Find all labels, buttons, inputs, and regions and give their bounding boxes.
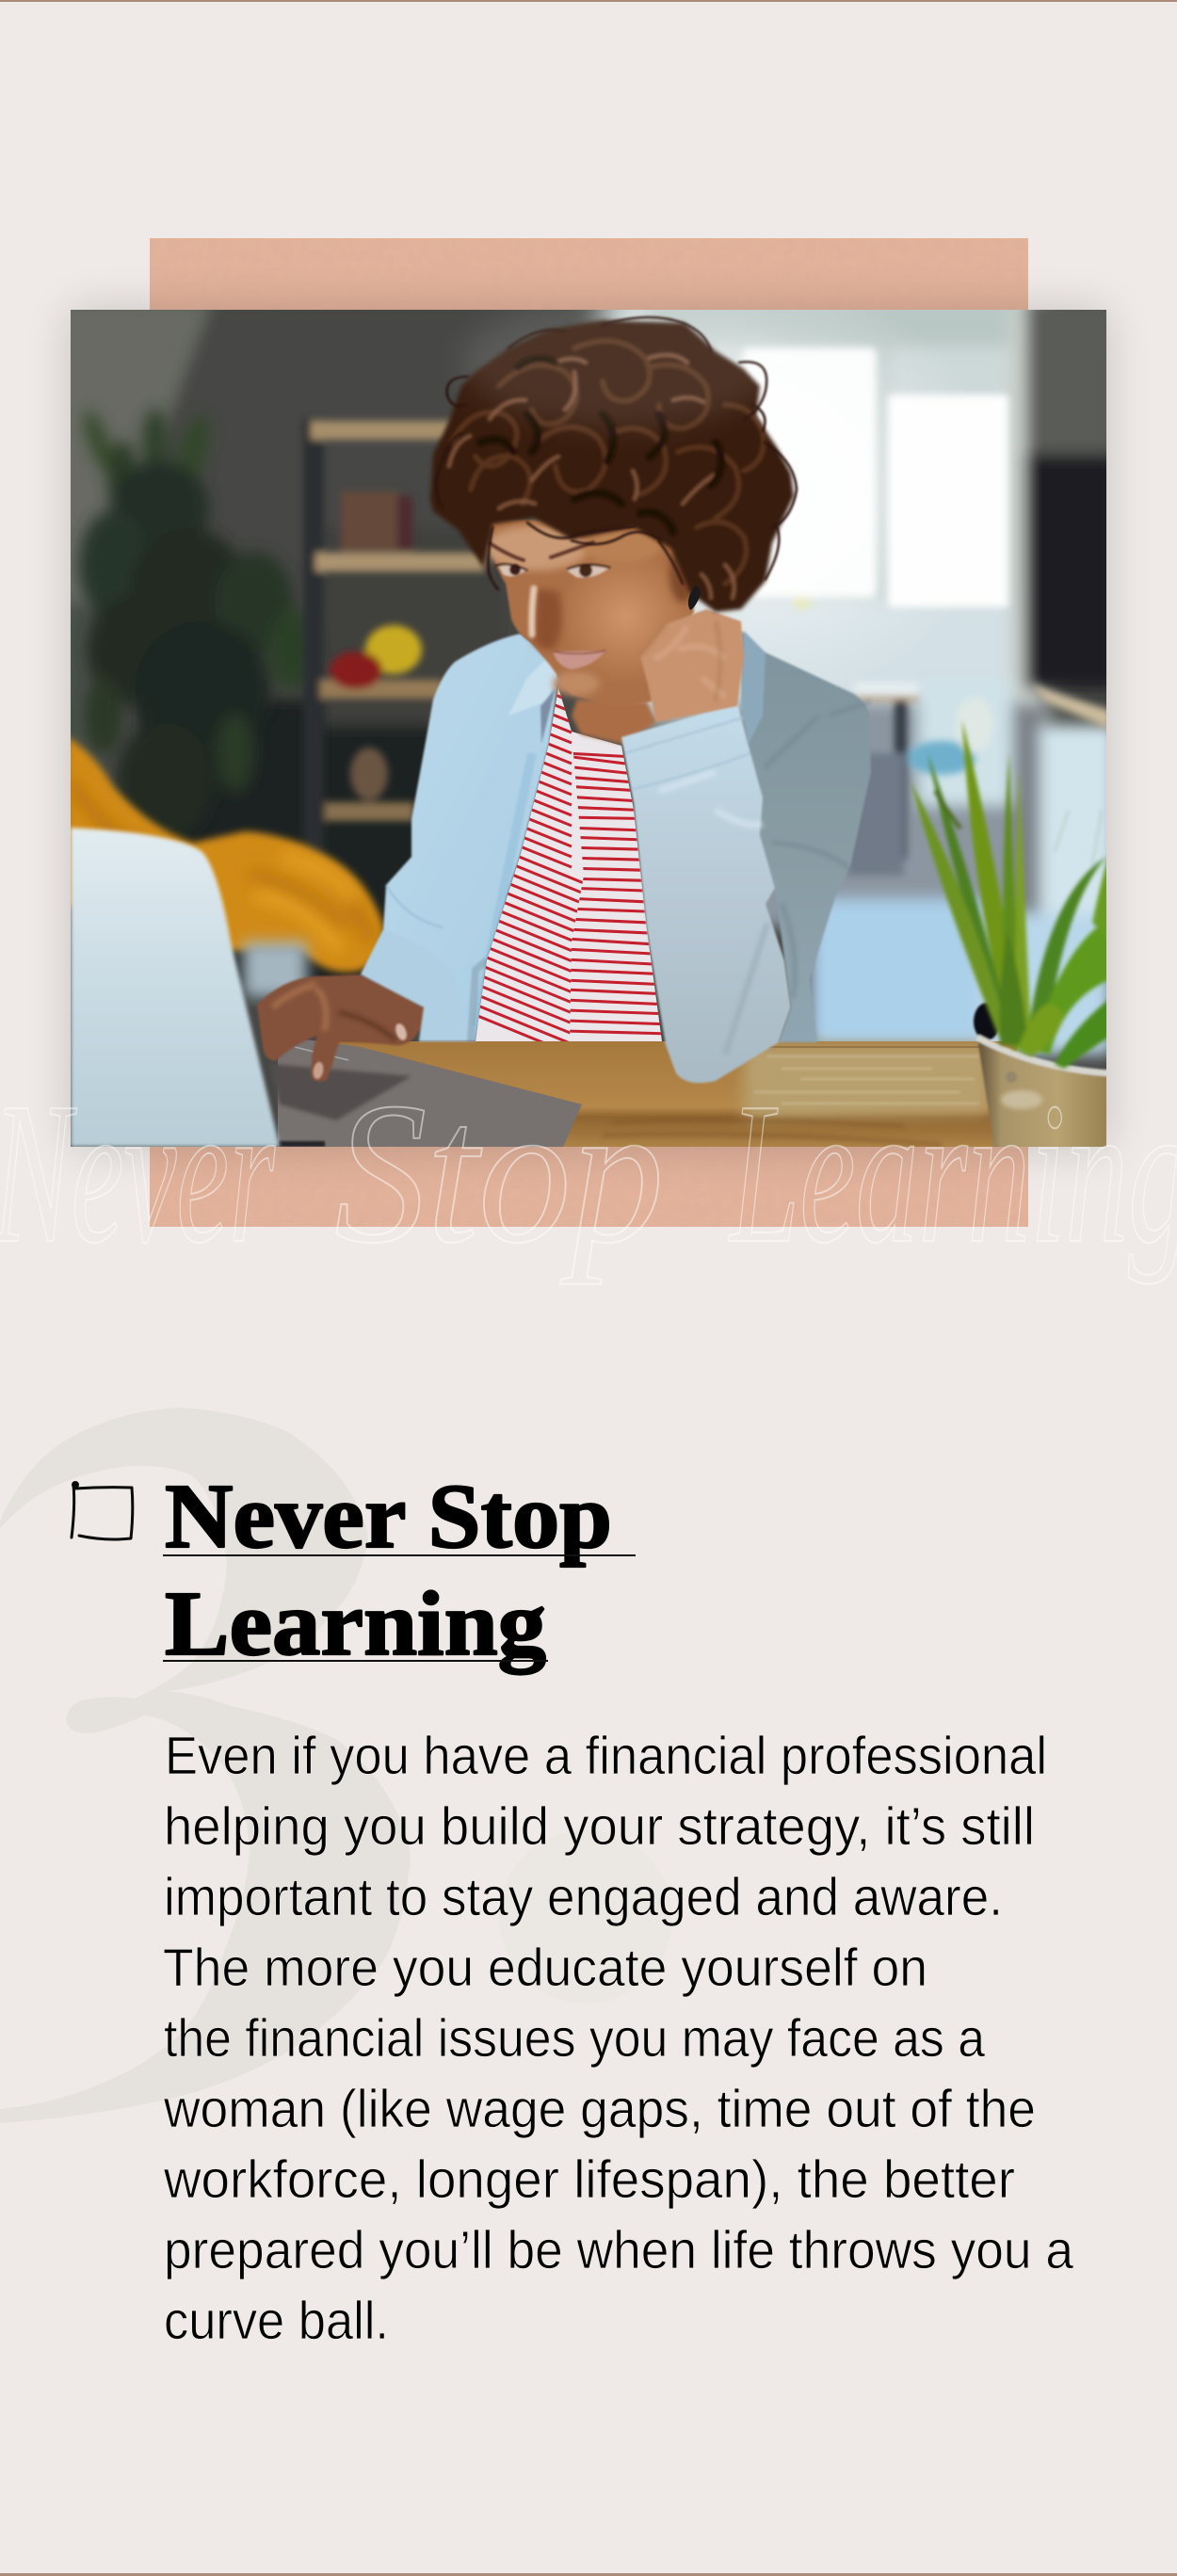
body line 9: curve ball. bbox=[164, 2291, 389, 2351]
body line 2: helping you build your strategy, it’s still bbox=[164, 1796, 1035, 1857]
body line 6: woman (like wage gaps, time out of the bbox=[163, 2079, 1036, 2139]
cabinet top board bbox=[1031, 684, 1111, 730]
windows bbox=[743, 348, 1008, 876]
heading underlines bbox=[163, 1554, 636, 1662]
earring bbox=[688, 586, 701, 610]
pink paper panel behind photo bbox=[150, 238, 1028, 1227]
eyes bbox=[499, 566, 525, 576]
laptop base bbox=[270, 1036, 582, 1147]
background script title bbox=[0, 1060, 1177, 1285]
neck bbox=[572, 700, 656, 744]
plant pot bbox=[974, 1003, 1111, 1149]
photo drop shadow bbox=[71, 310, 1106, 1147]
blurred plant on left bbox=[78, 408, 314, 840]
back-light haze on hair bbox=[461, 297, 782, 428]
ghost numeral 3 bbox=[0, 1408, 411, 2123]
grey shirt shoulder bbox=[741, 631, 871, 1042]
ghost numeral ball terminal bbox=[499, 1830, 672, 2004]
heading bbox=[165, 1466, 612, 1675]
body line 7: workforce, longer lifespan), the better bbox=[163, 2149, 1015, 2210]
soft light area of the room bbox=[603, 282, 1045, 725]
short curly hair bbox=[430, 297, 797, 612]
top border line bbox=[0, 0, 1177, 2]
blurred room background bbox=[71, 310, 520, 1006]
heading line 2: Learning bbox=[165, 1573, 546, 1675]
laptop lid bbox=[71, 828, 280, 1147]
body line 8: prepared you’ll be when life throws you a bbox=[164, 2220, 1073, 2280]
photo: woman working at laptop bbox=[56, 273, 1121, 1149]
body line 4: The more you educate yourself on bbox=[163, 1938, 927, 1998]
checkbox icon bbox=[72, 1482, 133, 1539]
brows bbox=[490, 542, 593, 560]
plant blades bbox=[911, 720, 1111, 1069]
table bbox=[282, 1041, 1017, 1147]
lips bbox=[553, 651, 605, 669]
heading line 1: Never Stop bbox=[165, 1466, 612, 1568]
body line 3: important to stay engaged and aware. bbox=[164, 1867, 1003, 1927]
body paragraph bbox=[163, 1726, 1073, 2351]
hand on trackpad bbox=[257, 974, 426, 1082]
face bbox=[485, 518, 696, 705]
fist on cheek bbox=[640, 609, 744, 722]
body line 1: Even if you have a financial professional bbox=[165, 1726, 1047, 1786]
right sleeve bbox=[621, 703, 791, 1083]
script word: Never: Never bbox=[0, 1060, 276, 1285]
glow from window bbox=[682, 310, 908, 653]
striped t-shirt bbox=[476, 687, 662, 1041]
orange blanket bbox=[66, 736, 384, 972]
weathered wood bbox=[603, 1045, 989, 1145]
bottom border line bbox=[0, 2573, 1177, 2576]
body line 5: the financial issues you may face as a bbox=[164, 2008, 985, 2069]
blurred shelves with objects bbox=[303, 419, 485, 899]
denim shirt left panel bbox=[361, 634, 565, 1041]
script word: Stop: Stop bbox=[334, 1060, 664, 1285]
grey cushion by laptop bbox=[243, 942, 307, 998]
